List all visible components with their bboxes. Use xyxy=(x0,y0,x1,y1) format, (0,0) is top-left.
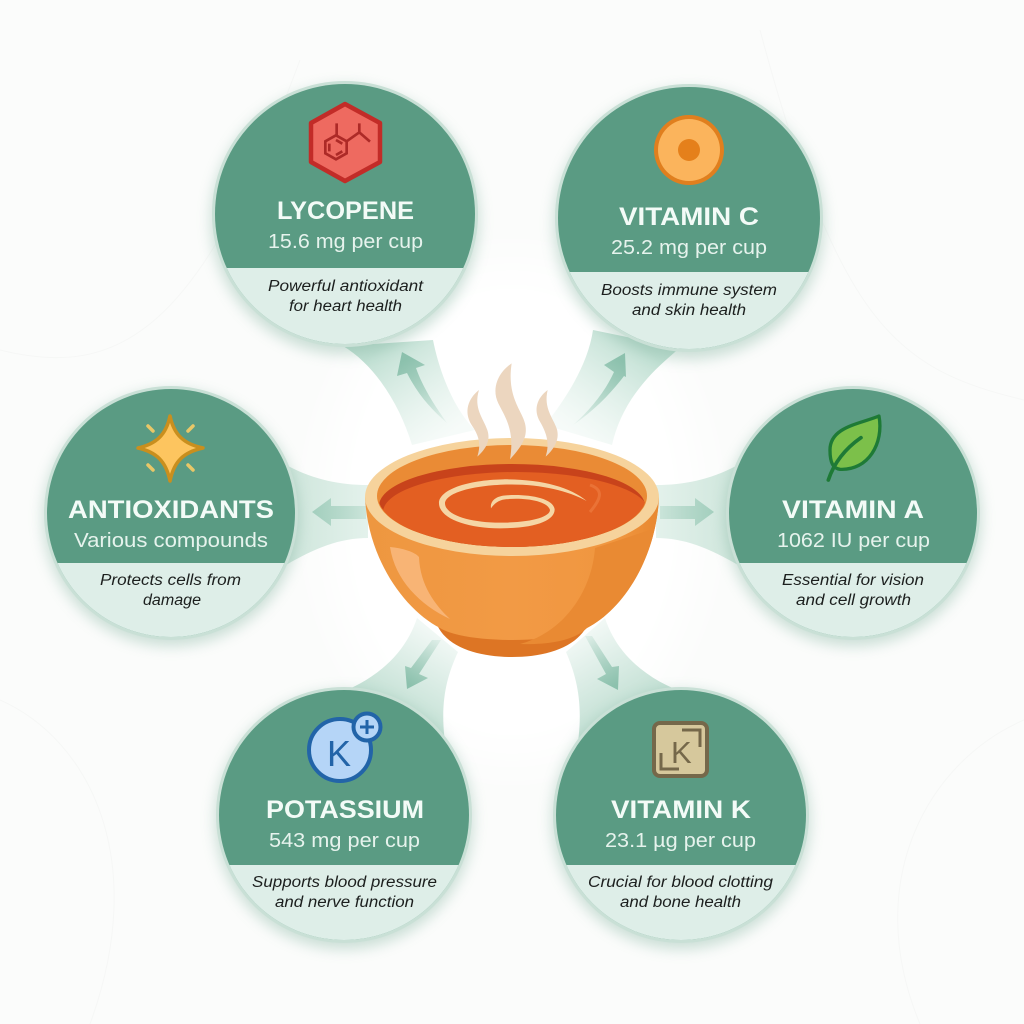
description xyxy=(601,282,777,319)
icon: sparkle xyxy=(138,416,203,481)
description: Powerful antioxidant xyxy=(268,278,424,295)
connectors xyxy=(286,330,738,760)
panel: antioxidants xyxy=(40,380,302,646)
description: and skin health xyxy=(632,302,746,319)
arrow: to vitamin A xyxy=(660,498,714,526)
icon: molecule hexagon xyxy=(311,104,380,181)
panel: lycopene xyxy=(210,80,480,354)
description xyxy=(252,874,437,911)
icon: vitamin K tile: K xyxy=(671,735,692,770)
description xyxy=(100,572,241,609)
description: and cell growth xyxy=(796,592,911,609)
amount: 1062 IU per cup xyxy=(777,530,930,552)
bowl body xyxy=(365,497,659,640)
description: Essential for vision xyxy=(782,572,924,589)
rim xyxy=(365,438,659,556)
bowl foot xyxy=(436,622,589,657)
steam xyxy=(467,363,558,459)
heading: VITAMIN A xyxy=(782,496,924,524)
amount: 23.1 µg per cup xyxy=(605,830,756,852)
panel: potassium xyxy=(210,680,480,949)
description: damage xyxy=(143,592,201,609)
heading: LYCOPENE xyxy=(277,197,414,225)
arrow: to potassium xyxy=(405,640,441,689)
icon: potassium ion: K xyxy=(327,733,351,774)
panel: vitamin A xyxy=(722,380,984,646)
amount: Various compounds xyxy=(74,530,268,552)
bowl highlight xyxy=(390,547,450,619)
arrow: to vitamin C xyxy=(573,353,626,425)
description xyxy=(588,874,773,911)
description: and bone health xyxy=(620,894,741,911)
heading: VITAMIN K xyxy=(611,796,751,824)
panel: vitamin K xyxy=(545,680,815,949)
bowl interior xyxy=(377,445,647,547)
amount: 15.6 mg per cup xyxy=(268,231,423,253)
description: Protects cells from xyxy=(100,572,241,589)
description: Crucial for blood clotting xyxy=(588,874,773,891)
heading: POTASSIUM xyxy=(266,796,424,824)
cream swirl xyxy=(439,479,587,528)
amount: 25.2 mg per cup xyxy=(611,237,767,259)
arrow: to antioxidants xyxy=(312,498,366,526)
soup surface xyxy=(379,464,649,552)
bowl shaded side xyxy=(520,497,659,644)
arrow: to lycopene xyxy=(397,352,447,423)
description: for heart health xyxy=(289,298,402,315)
description xyxy=(268,278,424,315)
soup bowl xyxy=(365,363,659,657)
icon: potassium ion xyxy=(309,714,380,781)
heading: VITAMIN C xyxy=(619,203,759,231)
icon: vitamin C orange xyxy=(654,115,724,185)
icon: vitamin K tile xyxy=(654,723,707,776)
arrow: to vitamin K xyxy=(585,636,619,690)
panel: vitamin C xyxy=(550,80,830,359)
heading: ANTIOXIDANTS xyxy=(68,496,274,524)
description: Boosts immune system xyxy=(601,282,777,299)
amount: 543 mg per cup xyxy=(269,830,420,852)
description: and nerve function xyxy=(275,894,414,911)
description xyxy=(782,572,924,609)
description: Supports blood pressure xyxy=(252,874,437,891)
icon: leaf xyxy=(828,416,880,480)
